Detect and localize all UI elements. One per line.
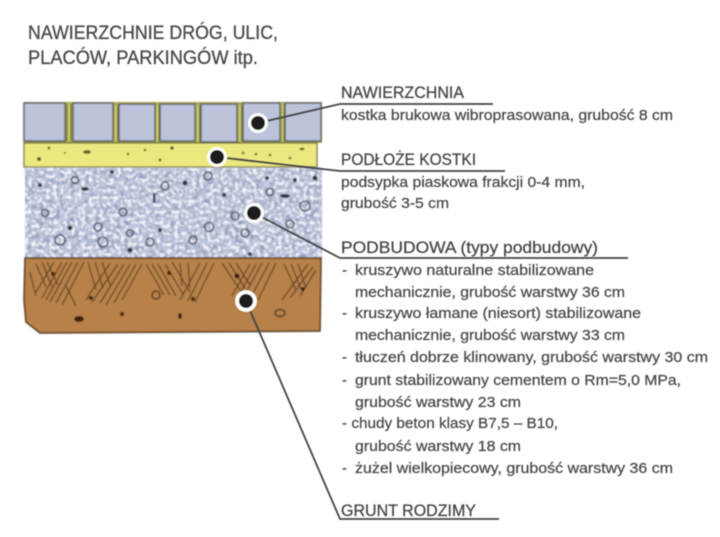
label: podbudowa list: - [342,349,347,366]
label: nawierzchnia [341,84,673,124]
leader: podłoże kostki [207,147,505,171]
label: podbudowa list: - [342,372,347,389]
leader: nawierzchnia [248,104,493,133]
title [28,21,278,69]
title: PLACÓW, PARKINGÓW itp. [28,46,258,69]
label: podbudowa list: - [342,305,347,322]
layer: sand bedding [24,143,317,167]
label: podbudowa list: kruszywo naturalne stabilizowane [355,262,594,279]
label: podbudowa list: grubość warstwy 18 cm [355,438,521,455]
label: nawierzchnia: NAWIERZCHNIA [341,84,464,102]
label: podłoże kostki: PODŁOŻE KOSTKI [341,150,476,169]
label: podbudowa list: - [342,460,347,477]
label: podbudowa list: mechanicznie, grubość warstwy 36 cm [355,284,625,301]
label: podłoże kostki: grubość 3-5 cm [341,195,449,212]
label: podbudowa list: kruszywo łamane (niesort) stabilizowane [355,305,641,322]
label: podbudowa list: tłuczeń dobrze klinowany, grubość warstwy 30 cm [355,349,708,366]
label: podbudowa list: grubość warstwy 23 cm [355,394,521,411]
label: podbudowa list: mechanicznie, grubość warstwy 33 cm [355,327,625,344]
label: podbudowa list: - chudy beton klasy B7,5 – B10, [342,415,558,432]
layer: paving blocks [24,102,322,143]
label: podłoże kostki: podsypka piaskowa frakcji 0-4 mm, [341,174,585,191]
label: grunt rodzimy: GRUNT RODZIMY [341,502,476,520]
label: podbudowa list: żużel wielkopiecowy, grubość warstwy 36 cm [355,460,673,477]
title: NAWIERZCHNIE DRÓG, ULIC, [28,21,278,44]
leader: grunt rodzimy [235,290,499,519]
label: podłoże kostki [341,150,585,212]
label: podbudowa list [341,239,708,477]
label: nawierzchnia: kostka brukowa wibroprasowana, grubość 8 cm [341,107,673,124]
leader: podbudowa [244,203,628,258]
label: podbudowa list: grunt stabilizowany cementem o Rm=5,0 MPa, [355,372,681,389]
layered pavement cross-section [24,102,322,333]
layer: native soil [24,258,321,333]
layer: gravel base [25,168,322,258]
label: podbudowa list: PODBUDOWA (typy podbudowy) [341,239,598,257]
label: podbudowa list: - [342,262,347,279]
